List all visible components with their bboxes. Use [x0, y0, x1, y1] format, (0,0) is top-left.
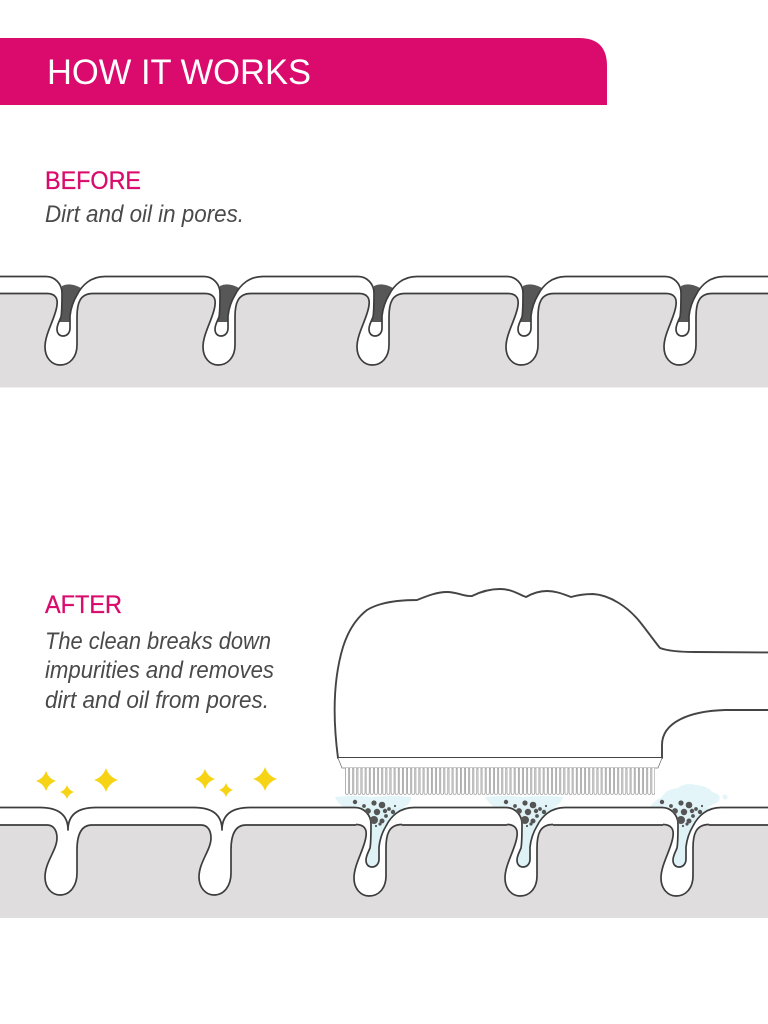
sparkles above clean pores	[36, 767, 277, 799]
title: HOW IT WORKS	[47, 53, 311, 92]
skin diagram: before, pores with dirt	[0, 276, 768, 388]
after description: impurities and removes	[45, 657, 274, 684]
bristles	[345, 768, 655, 796]
after heading: AFTER	[45, 591, 122, 619]
foam around pores	[335, 784, 728, 808]
cleansing brush device	[335, 589, 768, 796]
before heading: BEFORE	[45, 167, 141, 195]
dirt particles lifted from pores	[353, 800, 703, 827]
after description: The clean breaks down	[45, 628, 271, 655]
header banner	[0, 38, 607, 105]
brush neck	[338, 758, 662, 768]
after description	[45, 628, 274, 714]
skin diagram: after, clean pores and pores being cleaned	[0, 808, 768, 918]
before description: Dirt and oil in pores.	[45, 201, 244, 228]
after description: dirt and oil from pores.	[45, 687, 269, 714]
